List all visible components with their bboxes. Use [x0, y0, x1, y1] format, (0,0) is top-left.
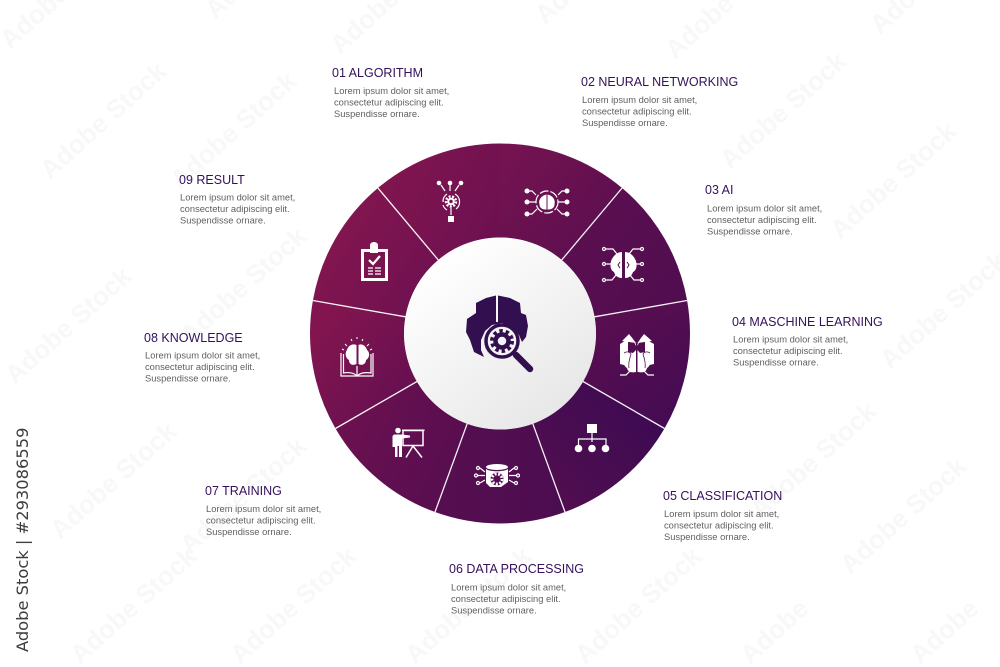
text block 08	[144, 331, 260, 384]
text block 05: Suspendisse ornare.	[664, 532, 750, 542]
segment 03	[562, 188, 687, 317]
segment 06	[435, 424, 565, 523]
segment 01	[378, 144, 500, 260]
text block 07: Lorem ipsum dolor sit amet,	[206, 504, 321, 514]
icon 08: knowledge book and brain	[341, 337, 373, 376]
text block 08: Lorem ipsum dolor sit amet,	[145, 350, 260, 360]
text block 05: Lorem ipsum dolor sit amet,	[664, 509, 779, 519]
text block 05: 05 CLASSIFICATION	[663, 489, 782, 503]
text block 01: Suspendisse ornare.	[334, 109, 420, 119]
segment 09	[313, 188, 438, 317]
text block 03	[705, 183, 822, 236]
watermark pattern: Adobe Stock	[744, 395, 883, 524]
watermark pattern: Adobe Stock	[44, 415, 183, 544]
text block 06	[449, 562, 584, 616]
center circle	[404, 238, 596, 430]
text block 04: 04 MASCHINE LEARNING	[732, 315, 883, 329]
text block 09: consectetur adipiscing elit.	[180, 204, 290, 214]
watermark pattern: Adobe Stock	[834, 450, 973, 579]
text block 06: Lorem ipsum dolor sit amet,	[451, 582, 566, 592]
text block 03: consectetur adipiscing elit.	[707, 215, 817, 225]
icon: brain with magnifying glass and gear	[466, 296, 530, 369]
icon 03: AI brain	[602, 248, 644, 282]
icon 01: algorithm	[437, 181, 463, 222]
text block 01: consectetur adipiscing elit.	[334, 98, 444, 108]
text block 03: Suspendisse ornare.	[707, 226, 793, 236]
text block 06: 06 DATA PROCESSING	[449, 562, 584, 576]
text block 02: 02 NEURAL NETWORKING	[581, 75, 738, 89]
text block 01	[332, 66, 449, 119]
icon 02: neural networking	[524, 188, 570, 216]
text block 08: 08 KNOWLEDGE	[144, 331, 243, 345]
text block 04	[732, 315, 883, 368]
segment 08	[310, 300, 417, 428]
text block 03: Lorem ipsum dolor sit amet,	[707, 204, 822, 214]
watermark pattern: Adobe Stock	[399, 540, 538, 667]
donut chart: nine segments	[310, 144, 690, 523]
text block 04: Lorem ipsum dolor sit amet,	[733, 334, 848, 344]
text block 01: Lorem ipsum dolor sit amet,	[334, 86, 449, 96]
watermark pattern: Adobe Stock	[174, 430, 313, 559]
watermark pattern: Adobe Stock	[174, 220, 313, 349]
icon 09: result clipboard	[361, 242, 388, 281]
stock id vertical label: Adobe Stock | #293086559	[13, 428, 32, 652]
text block 04: Suspendisse ornare.	[733, 358, 819, 368]
icon 07: training presenter	[392, 428, 424, 458]
watermark pattern: Adobe Stock	[64, 540, 203, 667]
text block 09: Suspendisse ornare.	[180, 216, 266, 226]
segment 04	[583, 300, 690, 428]
icon 05: classification hierarchy	[575, 424, 609, 452]
text block 06: consectetur adipiscing elit.	[451, 594, 561, 604]
text block 02	[581, 75, 738, 128]
segment 05	[533, 382, 664, 512]
text block 02: Lorem ipsum dolor sit amet,	[582, 95, 697, 105]
text block 08: consectetur adipiscing elit.	[145, 362, 255, 372]
text block 07: Suspendisse ornare.	[206, 527, 292, 537]
watermark pattern: Adobe Stock	[34, 55, 173, 184]
text block 06: Suspendisse ornare.	[451, 606, 537, 616]
text block 08: Suspendisse ornare.	[145, 374, 231, 384]
text block 09: Lorem ipsum dolor sit amet,	[180, 192, 295, 202]
text block 07: 07 TRAINING	[205, 484, 282, 498]
text block 07	[205, 484, 321, 537]
text block 09: 09 RESULT	[179, 173, 245, 187]
text block 07: consectetur adipiscing elit.	[206, 516, 316, 526]
text block 03: 03 AI	[705, 183, 734, 197]
watermark pattern: Adobe Stock	[224, 540, 363, 667]
text block 05: consectetur adipiscing elit.	[664, 520, 774, 530]
text block 01: 01 ALGORITHM	[332, 66, 423, 80]
text block 05	[663, 489, 782, 542]
watermark pattern: Adobe Stock	[824, 115, 963, 244]
watermark pattern: Adobe Stock	[569, 540, 708, 667]
segment 02	[500, 144, 622, 260]
text block 04: consectetur adipiscing elit.	[733, 346, 843, 356]
segment 07	[336, 382, 467, 512]
watermark pattern: Adobe Stock	[0, 260, 138, 389]
watermark pattern: Adobe Stock	[714, 45, 853, 174]
watermark pattern: Adobe Stock	[164, 65, 303, 194]
text block 02: Suspendisse ornare.	[582, 118, 668, 128]
icon 04: machine learning book	[620, 334, 654, 375]
text block 09	[179, 173, 295, 226]
text block 02: consectetur adipiscing elit.	[582, 106, 692, 116]
icon 06: data processing	[474, 464, 520, 487]
